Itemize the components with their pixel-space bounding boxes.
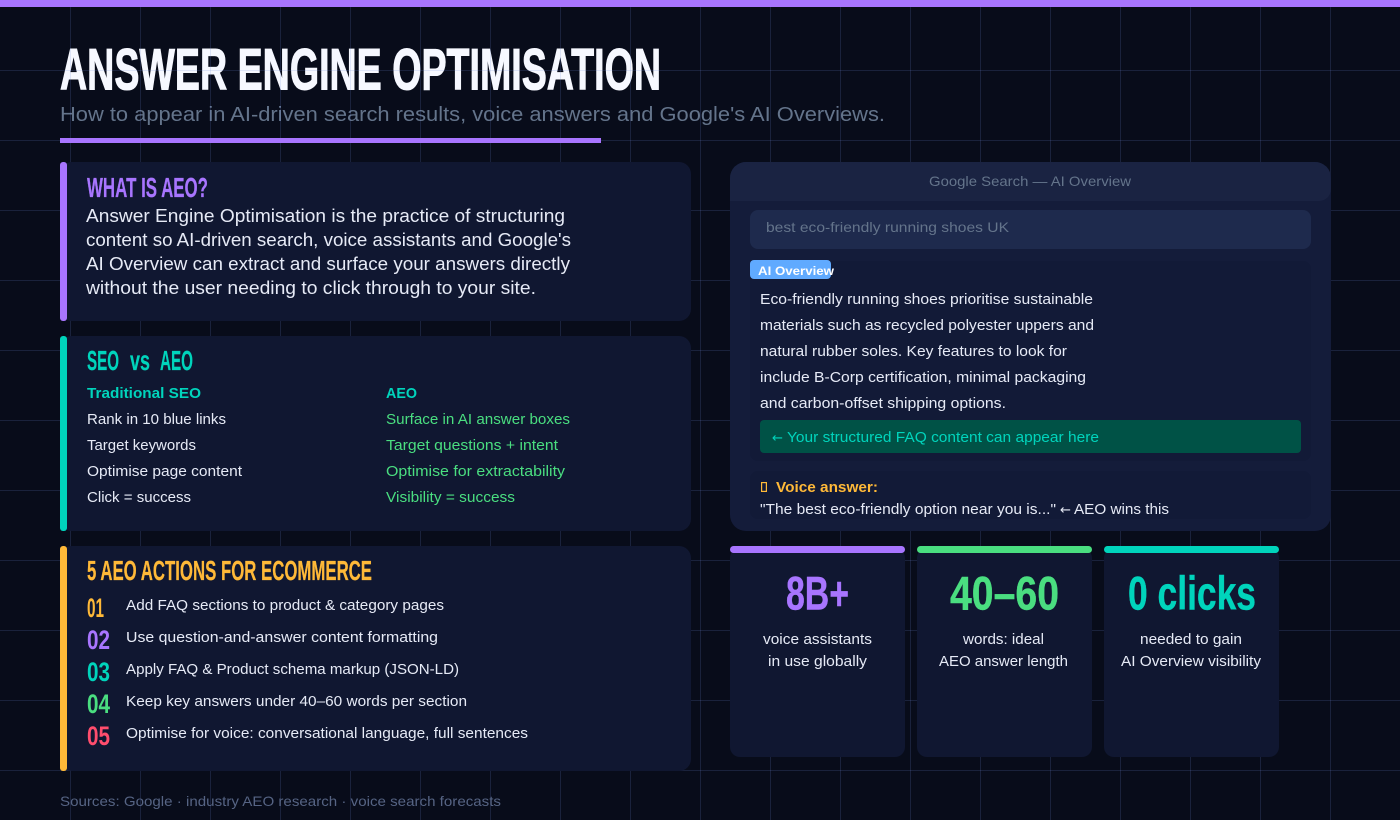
action 03: Apply FAQ & Product schema markup (JSON-LD) — [126, 662, 459, 678]
definition text: Answer Engine Optimisation is the practice of structuring — [86, 206, 565, 226]
top accent bar — [0, 0, 1400, 7]
action 05: Optimise for voice: conversational language, full sentences — [126, 726, 528, 742]
stat card: 40–60 — [917, 546, 1092, 757]
column: AEO: Visibility = success — [386, 489, 515, 506]
voice answer box: Voice answer: — [776, 479, 878, 496]
FAQ callout: ← — [772, 431, 783, 446]
heading: actions: 5 AEO ACTIONS FOR ECOMMERCE — [87, 555, 372, 586]
column: traditional SEO — [87, 385, 243, 506]
action 04: 04 — [87, 689, 110, 719]
action 01: 01 — [87, 593, 104, 623]
panel: 5 AEO actions — [60, 546, 691, 771]
overview text — [760, 292, 1094, 412]
action 04 — [87, 689, 467, 719]
stat card: 8B+: voice assistants — [763, 632, 872, 648]
FAQ callout: Your structured FAQ content can appear here — [787, 430, 1099, 446]
action 04: Keep key answers under 40–60 words per section — [126, 694, 467, 710]
column: AEO: AEO — [386, 385, 417, 402]
definition text — [85, 206, 571, 298]
column: traditional SEO: Click = success — [87, 489, 191, 506]
column: traditional SEO: Target keywords — [87, 437, 196, 454]
definition text: AI Overview can extract and surface your answers directly — [86, 254, 570, 274]
action 02: Use question-and-answer content formatting — [126, 630, 438, 646]
overview text: Eco-friendly running shoes prioritise sustainable — [760, 292, 1093, 308]
stat card: 0 clicks — [1104, 546, 1279, 757]
column: traditional SEO: Rank in 10 blue links — [87, 411, 226, 428]
stat card: 0 clicks: AI Overview visibility — [1121, 654, 1262, 670]
search bar: best eco-friendly running shoes UK — [766, 219, 1010, 235]
FAQ callout — [760, 420, 1301, 453]
AI overview badge: AI Overview — [758, 264, 835, 278]
heading: SEO vs AEO: SEO — [87, 345, 119, 376]
action 03 — [87, 657, 459, 687]
action 05 — [87, 721, 528, 751]
panel: SEO vs AEO — [60, 336, 691, 531]
heading: SEO vs AEO: vs — [130, 345, 150, 376]
column: AEO: Optimise for extractability — [386, 463, 566, 480]
definition text: content so AI-driven search, voice assistants and Google's — [86, 230, 571, 250]
stat card: 8B+: 8B+ — [786, 568, 849, 620]
icon: missing glyph box — [762, 483, 766, 491]
panel: Google search mockup — [730, 162, 1331, 531]
voice answer box — [750, 471, 1311, 519]
heading: SEO vs AEO — [87, 345, 193, 376]
header — [60, 38, 885, 126]
overview text: natural rubber soles. Key features to look for — [760, 344, 1067, 360]
heading: SEO vs AEO: AEO — [160, 345, 193, 376]
action 01 — [87, 593, 444, 623]
sources footnote: Sources: Google · industry AEO research · voice search forecasts — [60, 793, 501, 809]
stat card: 40–60: words: ideal — [962, 632, 1044, 648]
action 05: 05 — [87, 721, 110, 751]
title underline — [60, 138, 601, 143]
definition text: without the user needing to click through to your site. — [85, 278, 536, 298]
column: traditional SEO: Optimise page content — [87, 463, 243, 480]
stat card: 0 clicks: 0 clicks — [1128, 568, 1256, 620]
heading: what is AEO: WHAT IS AEO? — [87, 172, 208, 203]
AI overview box — [750, 260, 1311, 461]
column: AEO — [386, 385, 570, 506]
panel: what is AEO — [60, 162, 691, 321]
action 03: 03 — [87, 657, 110, 687]
voice answer box: AEO wins this — [1074, 502, 1169, 518]
title: ANSWER ENGINE OPTIMISATION — [60, 38, 661, 102]
browser header: Google Search — AI Overview — [929, 173, 1132, 189]
column: AEO: Surface in AI answer boxes — [386, 411, 570, 428]
stat card: 8B+ — [730, 546, 905, 757]
subtitle: How to appear in AI-driven search results, voice answers and Google's AI Overviews. — [60, 104, 885, 126]
voice answer box: ← — [1060, 503, 1071, 518]
AI overview badge — [750, 260, 835, 279]
column: traditional SEO: Traditional SEO — [87, 385, 201, 402]
column: AEO: Target questions + intent — [386, 437, 559, 454]
stat card: 0 clicks: needed to gain — [1140, 632, 1242, 648]
voice answer box: "The best eco-friendly option near you is..." — [760, 502, 1056, 518]
overview text: and carbon-offset shipping options. — [760, 396, 1006, 412]
action 02: 02 — [87, 625, 110, 655]
overview text: include B-Corp certification, minimal packaging — [760, 370, 1086, 386]
stat card: 8B+: in use globally — [768, 654, 868, 670]
stat card: 40–60: AEO answer length — [939, 654, 1068, 670]
overview text: materials such as recycled polyester uppers and — [760, 318, 1094, 334]
action 02 — [87, 625, 438, 655]
stat card: 40–60: 40–60 — [950, 568, 1059, 620]
action 01: Add FAQ sections to product & category pages — [126, 598, 444, 614]
browser header — [730, 162, 1331, 201]
search bar — [750, 210, 1311, 249]
